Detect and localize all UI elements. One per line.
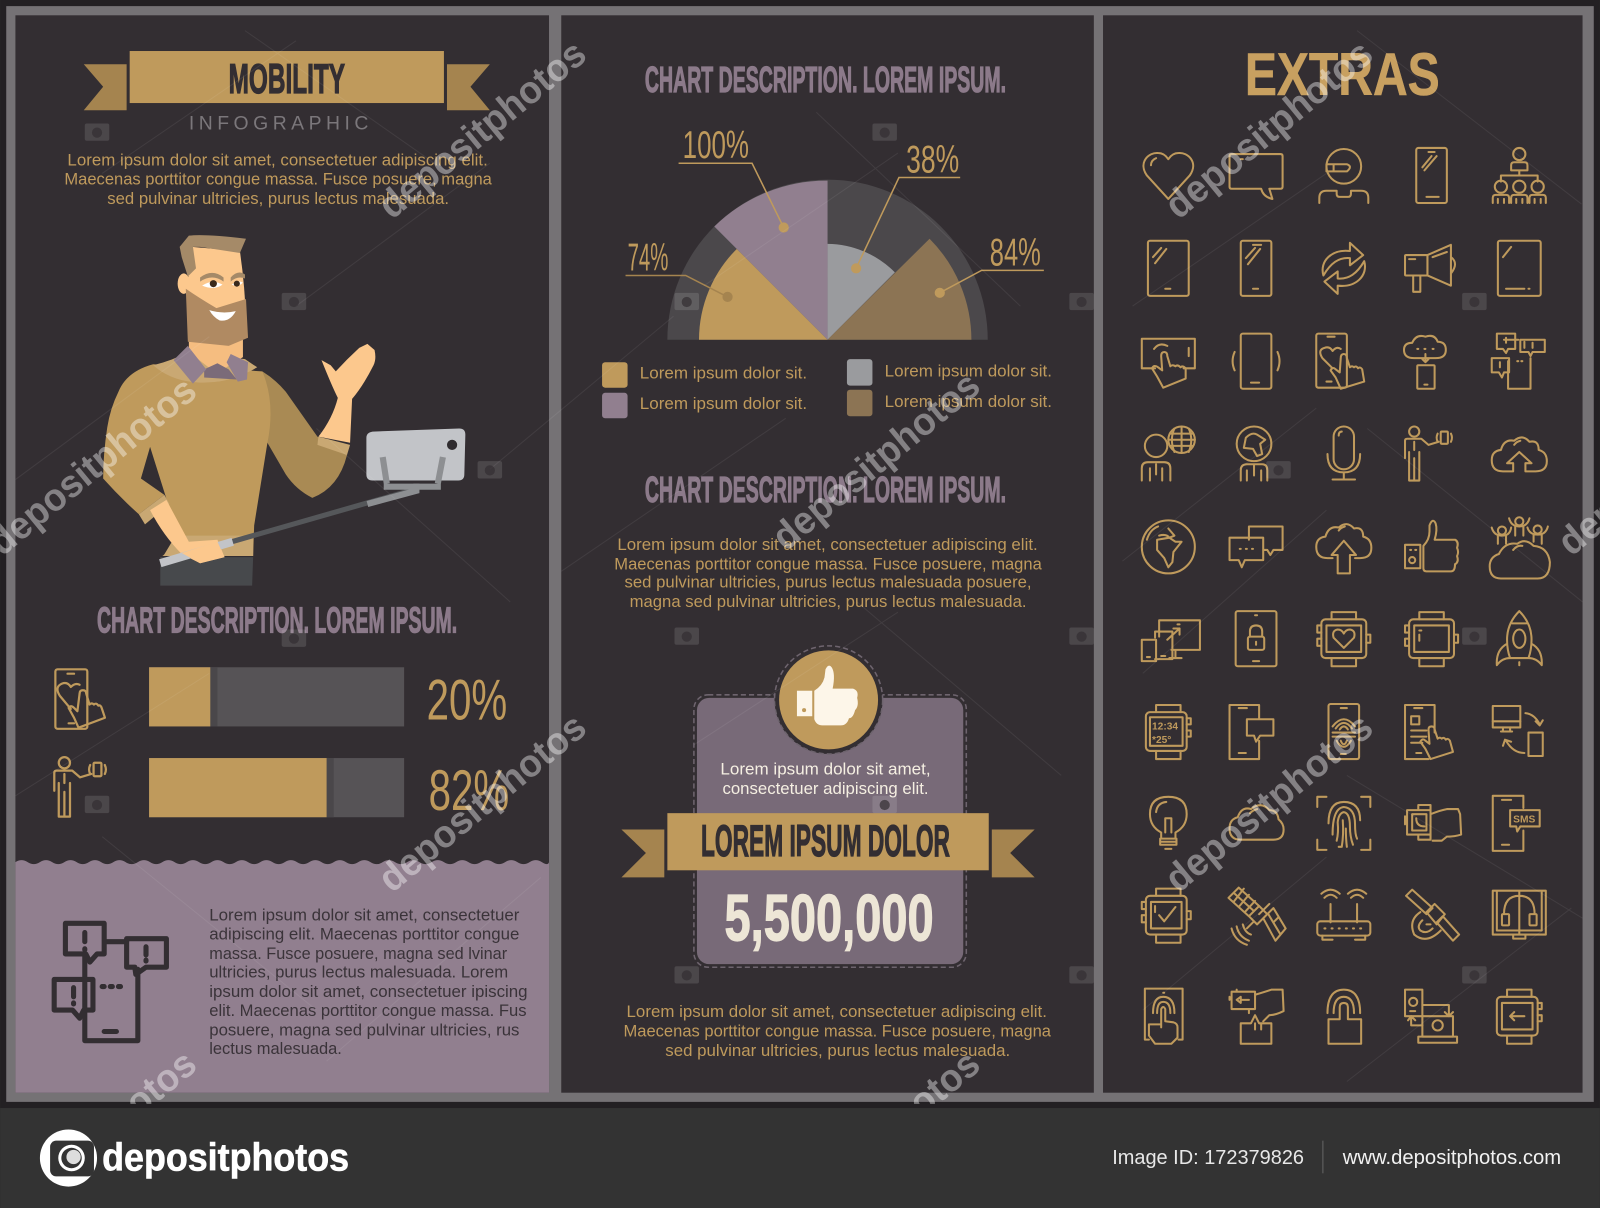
chart heading: CHART DESCRIPTION. LOREM IPSUM. [645, 60, 1006, 100]
icon: watch blank [1405, 612, 1458, 666]
icon: digital watch: 12:34 [1152, 721, 1178, 732]
callout card [621, 646, 1035, 967]
neck and collar [153, 352, 257, 383]
legend: Lorem ipsum dolor sit. [640, 365, 807, 383]
icon: wrist tap [1230, 990, 1284, 1044]
footer logo [40, 1129, 349, 1187]
icon: vibrating phone [1233, 334, 1280, 389]
icon: cloud with people [1490, 517, 1550, 578]
intro text: Lorem ipsum dolor sit amet, consectetuer adipiscing elit. [67, 151, 488, 169]
label 100%: 100% [683, 124, 749, 167]
icon: hierarchy [1493, 148, 1546, 203]
body text: ultricies, purus lectus malesuada. Lorem [209, 963, 508, 981]
panel: mobility [15, 15, 549, 1093]
icon: cloud upload [1492, 437, 1547, 471]
icon: wrist call watch [1405, 805, 1461, 841]
legend: Lorem ipsum dolor sit. [885, 362, 1052, 380]
icon: phone alert bubbles [1492, 334, 1545, 389]
paragraph: magna sed pulvinar ultricies, purus lectus malesuada. [630, 593, 1027, 611]
paragraph: sed pulvinar ultricies, purus lectus malesuada posuere, [625, 574, 1032, 592]
left hand [150, 500, 225, 563]
icon: globe person [1237, 426, 1271, 481]
paragraph: Maecenas porttitor congue massa. Fusce posuere, magna [614, 555, 1043, 573]
bar chart row 20% [149, 667, 507, 732]
icon: tablet lock [1236, 611, 1276, 666]
icon: wifi router [1317, 890, 1370, 940]
icon: heart [1143, 153, 1193, 199]
icon: speech bubble [1230, 154, 1283, 199]
icon: watch heart [1317, 612, 1370, 666]
callout text [720, 760, 931, 798]
icon: thumbs up [1405, 521, 1458, 571]
icon: thumbs up [778, 649, 880, 751]
body text: Lorem ipsum dolor sit amet, consectetuer [209, 906, 520, 924]
chart heading: CHART DESCRIPTION. LOREM IPSUM. [97, 601, 457, 641]
icon: cloud [1230, 805, 1284, 840]
footer logo: depositphotos [102, 1136, 349, 1179]
closing paragraph: Lorem ipsum dolor sit amet, consectetuer adipiscing elit. [627, 1003, 1047, 1021]
body text: adipiscing elit. Maecenas porttitor congue [209, 926, 519, 944]
icon: chat bubbles [1230, 526, 1283, 567]
left arm and torso [103, 364, 271, 556]
icon: phone with alert bubbles [54, 923, 166, 1041]
body text: posuere, magna sed pulvinar ultricies, rus [209, 1022, 519, 1040]
icon: device and laptop [1405, 990, 1457, 1043]
big number: 5,500,000 [724, 882, 934, 956]
closing paragraph: sed pulvinar ultricies, purus lectus malesuada. [665, 1042, 1010, 1060]
body text: ipsum dolor sit amet, consectetuer ipiscing [209, 983, 528, 1001]
semicircle chart [626, 124, 1044, 340]
illustration: man with selfie stick [103, 235, 465, 586]
icon: tablet touch [1145, 989, 1183, 1044]
icon: book headphones [1493, 891, 1546, 939]
body text: lectus malesuada. [209, 1040, 342, 1058]
watermark overlay: depositphotos [370, 32, 594, 227]
smartphone [366, 429, 465, 481]
watermark overlay: depositphotos [764, 363, 988, 559]
icon: phone document touch [1405, 705, 1453, 759]
icon: fingerprint scan [1317, 797, 1370, 850]
watermark overlay: depositphotos [1157, 705, 1381, 901]
title ribbon: MOBILITY [229, 55, 345, 102]
icon: refresh arrows [1323, 243, 1365, 294]
icon: light bulb [1150, 797, 1187, 849]
icon: phone heart touch [1316, 334, 1364, 389]
footer image id: Image ID: 172379826 [1112, 1147, 1304, 1169]
intro text: Maecenas porttitor congue massa. Fusce posuere, magna [64, 171, 493, 189]
label 74%: 74% [628, 236, 668, 279]
icon: cloud to phone [1404, 336, 1446, 389]
panel: charts [561, 15, 1094, 1093]
icon: touch gesture [1327, 990, 1361, 1044]
icon: smartphone [1241, 241, 1271, 296]
callout text: consectetuer adipiscing elit. [722, 780, 929, 798]
subtitle: INFOGRAPHIC [189, 113, 368, 135]
closing paragraph: Maecenas porttitor congue massa. Fusce posuere, magna [623, 1023, 1052, 1041]
body text [209, 906, 528, 1058]
icon: tablet [1148, 241, 1189, 296]
right arm [262, 371, 347, 498]
body text: elit. Maecenas porttitor congue massa. Fus [209, 1002, 527, 1020]
body text: massa. Fusce posuere, magna sed lvinar [209, 945, 508, 963]
legend: Lorem ipsum dolor sit. [885, 393, 1052, 411]
value ribbon [621, 813, 1035, 877]
icon: smartphone [1416, 148, 1447, 203]
paragraph: Lorem ipsum dolor sit amet, consectetuer adipiscing elit. [617, 536, 1038, 554]
footer url: www.depositphotos.com [1342, 1147, 1561, 1169]
icon: globe [1142, 520, 1195, 573]
extras heading: EXTRAS [1245, 41, 1440, 108]
watermark overlay: depositphotos [1157, 32, 1381, 227]
label 84% [935, 231, 1044, 298]
bar chart row 20%: 20% [427, 668, 507, 732]
footer bar [0, 1108, 1600, 1208]
label 100% [679, 124, 789, 233]
head [188, 247, 246, 321]
intro text: sed pulvinar ultricies, purus lectus malesuada. [107, 190, 449, 208]
icon: watch check [1142, 889, 1191, 943]
icon: watch arrow [1497, 990, 1542, 1044]
icon: phone fingerprint [1328, 704, 1359, 759]
icon: digital watch: *25° [1152, 735, 1171, 746]
label 74% [626, 236, 733, 302]
selfie stick [232, 490, 413, 542]
icon: tablet with swipe hand [1142, 339, 1195, 388]
closing paragraph [623, 1003, 1052, 1060]
icon: digital watch [1146, 705, 1191, 759]
icon: person with globe [1142, 426, 1195, 481]
icon: microphone [1327, 426, 1360, 480]
icon: monitor phone sync [1493, 706, 1543, 756]
forearm and hand [318, 344, 375, 443]
icon: satellite dish [1406, 890, 1459, 941]
icon: large tablet [1498, 241, 1541, 296]
title ribbon [84, 51, 490, 110]
icon: satellite panels [1229, 888, 1286, 945]
icon: megaphone [1405, 245, 1455, 292]
icon: phone SMS [1493, 796, 1540, 851]
lilac text panel [15, 860, 549, 1093]
chart heading: CHART DESCRIPTION. LOREM IPSUM. [645, 470, 1006, 510]
icon: phone SMS: SMS [1513, 814, 1535, 825]
bar chart row 82% [149, 758, 509, 823]
label 38% [851, 138, 960, 273]
trousers [160, 557, 253, 586]
bar chart row 82%: 82% [429, 759, 509, 823]
legend: Lorem ipsum dolor sit. [640, 395, 807, 413]
panel: extras [1103, 15, 1583, 1093]
value ribbon: LOREM IPSUM DOLOR [701, 815, 950, 866]
icon: phone with heart and hand [55, 669, 105, 729]
callout text: Lorem ipsum dolor sit amet, [720, 760, 931, 778]
paragraph [614, 536, 1043, 611]
icon: person with vr headset [1319, 149, 1368, 203]
icon: responsive devices [1142, 620, 1200, 661]
icon: cloud upload bold [1316, 524, 1371, 573]
watermark overlay: depositphotos [370, 705, 594, 901]
icon: rocket [1497, 611, 1542, 665]
icon: phone chat [1230, 705, 1273, 759]
label 84%: 84% [990, 231, 1041, 274]
label 38%: 38% [906, 138, 959, 181]
icon: person sharing phone [1405, 426, 1452, 481]
legend [602, 359, 1052, 418]
icon: person with phone signal [54, 757, 106, 817]
intro text [64, 151, 493, 208]
